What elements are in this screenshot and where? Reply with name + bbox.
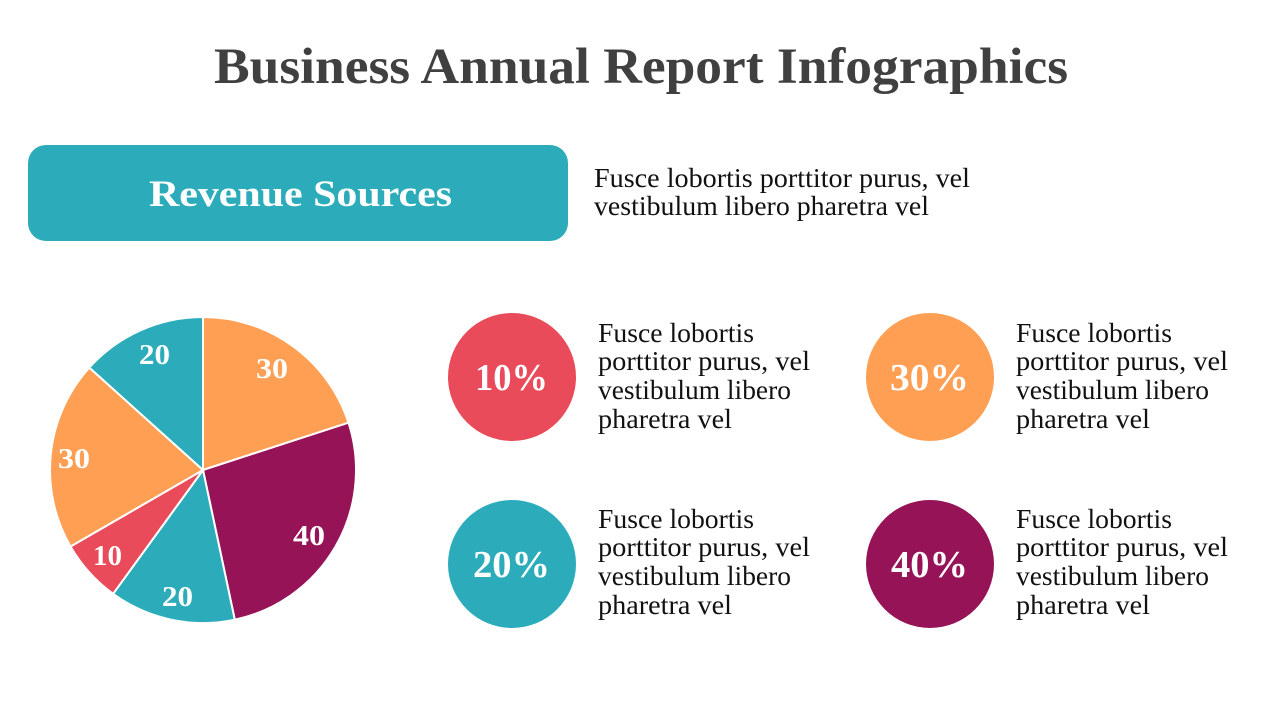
text block: 20 percent description bbox=[598, 504, 810, 620]
text block: 30 percent description: pharetra vel bbox=[1016, 404, 1150, 434]
stat: 20 percent bbox=[448, 500, 576, 628]
stat: 40 percent: 40% bbox=[891, 544, 968, 586]
text block: 10 percent description: vestibulum libero bbox=[598, 375, 791, 405]
pie chart: 10 bbox=[93, 541, 122, 572]
pie chart: 40 bbox=[293, 521, 325, 552]
text block: 30 percent description: vestibulum libero bbox=[1016, 375, 1209, 405]
pie chart bbox=[50, 317, 356, 623]
text block: 40 percent description: porttitor purus, vel bbox=[1016, 532, 1228, 562]
text block: revenue description: Fusce lobortis porttitor purus, vel bbox=[594, 163, 970, 193]
text block: 20 percent description: pharetra vel bbox=[598, 590, 732, 620]
text block: 30 percent description: porttitor purus, vel bbox=[1016, 346, 1228, 376]
pie chart: 20 bbox=[162, 582, 193, 613]
text block: 40 percent description: vestibulum libero bbox=[1016, 561, 1209, 591]
stat: 30 percent bbox=[866, 313, 994, 441]
text block: 10 percent description: Fusce lobortis bbox=[598, 318, 754, 348]
panel: revenue sources banner bbox=[28, 145, 568, 241]
stat: 30 percent: 30% bbox=[890, 357, 969, 399]
stat: 20 percent: 20% bbox=[473, 544, 550, 586]
panel: revenue sources banner: Revenue Sources bbox=[149, 174, 452, 215]
pie chart: 30 bbox=[58, 444, 90, 475]
text block: 10 percent description bbox=[598, 318, 810, 434]
stat: 10 percent: 10% bbox=[475, 357, 548, 399]
pie chart: 30 bbox=[256, 354, 288, 385]
text block: 30 percent description: Fusce lobortis bbox=[1016, 318, 1172, 348]
pie chart: 20 bbox=[139, 340, 170, 371]
text block: 10 percent description: porttitor purus, vel bbox=[598, 346, 810, 376]
title: Business Annual Report Infographics bbox=[214, 39, 1068, 95]
text block: 40 percent description: Fusce lobortis bbox=[1016, 504, 1172, 534]
text block: revenue description bbox=[594, 163, 970, 221]
text block: 40 percent description bbox=[1016, 504, 1228, 620]
stat: 10 percent bbox=[448, 313, 576, 441]
text block: 20 percent description: vestibulum libero bbox=[598, 561, 791, 591]
stat: 40 percent bbox=[866, 500, 994, 628]
text block: revenue description: vestibulum libero pharetra vel bbox=[594, 191, 929, 221]
text block: 40 percent description: pharetra vel bbox=[1016, 590, 1150, 620]
text block: 20 percent description: Fusce lobortis bbox=[598, 504, 754, 534]
text block: 30 percent description bbox=[1016, 318, 1228, 434]
text block: 10 percent description: pharetra vel bbox=[598, 404, 732, 434]
text block: 20 percent description: porttitor purus, vel bbox=[598, 532, 810, 562]
